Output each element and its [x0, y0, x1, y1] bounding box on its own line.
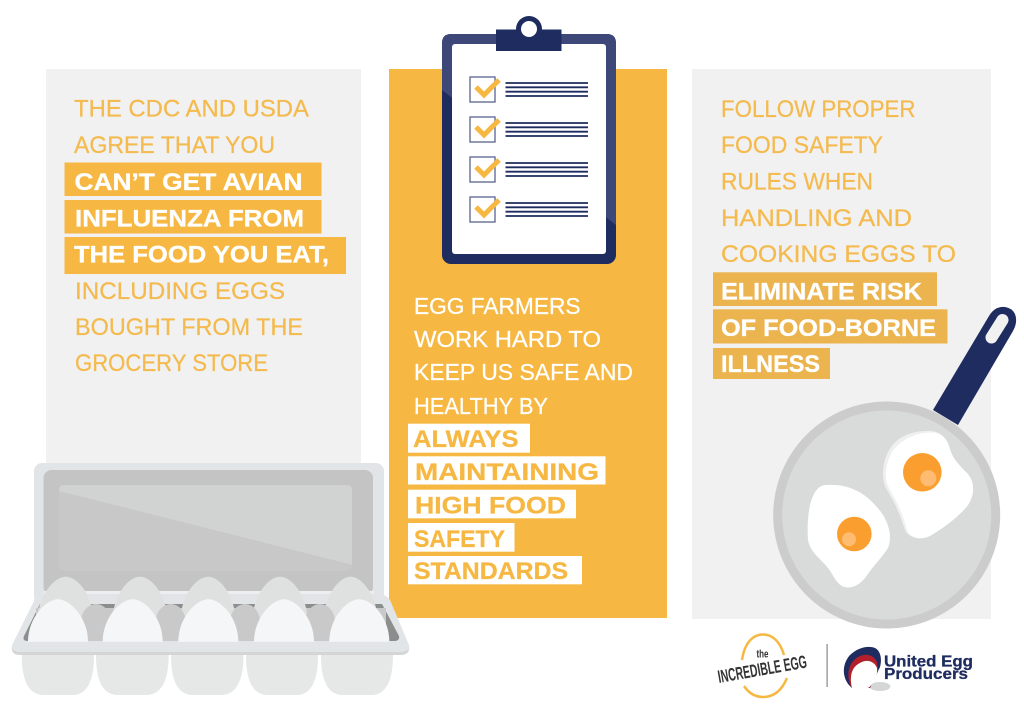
highlighted statement: cannot get avian influenza from food: CAN’T GET AVIAN — [74, 169, 302, 196]
highlighted statement: eliminate risk of food-borne illness — [713, 272, 948, 379]
logo: The Incredible Egg — [716, 634, 808, 697]
panel: egg farmers message — [389, 69, 667, 618]
highlighted statement: always maintaining high food safety standards: STANDARDS — [414, 558, 568, 585]
text block: follow proper food safety rules: FOOD SAFETY — [721, 132, 883, 159]
text block: CDC and USDA agree: AGREE THAT YOU — [74, 132, 275, 159]
panel: CDC and USDA message — [46, 69, 361, 469]
text block: follow proper food safety rules: FOLLOW PROPER — [721, 96, 916, 123]
text block: egg farmers work hard: EGG FARMERS — [414, 293, 580, 319]
text block: follow proper food safety rules: HANDLING AND — [721, 205, 912, 232]
icon: egg carton — [12, 463, 409, 695]
fried egg right — [883, 431, 973, 538]
highlighted statement: always maintaining high food safety standards: SAFETY — [414, 526, 505, 553]
highlighted statement: eliminate risk of food-borne illness: ELIMINATE RISK — [721, 278, 923, 305]
highlighted statement: always maintaining high food safety standards — [408, 424, 606, 585]
checklist row 1 — [470, 77, 588, 102]
logo: United Egg Producers: United Egg — [884, 654, 973, 671]
icon: frying pan with eggs — [773, 307, 1016, 628]
logo: United Egg Producers: Producers — [884, 666, 968, 683]
checklist row 2 — [470, 117, 588, 142]
text block: including eggs from grocery store: INCLUDING EGGS — [75, 278, 285, 305]
text block: follow proper food safety rules: COOKING EGGS TO — [721, 241, 956, 268]
egg cups — [22, 655, 393, 695]
pan body — [773, 402, 1000, 628]
text block: egg farmers work hard: HEALTHY BY — [414, 393, 548, 419]
text block: egg farmers work hard: KEEP US SAFE AND — [414, 359, 633, 385]
logo: The Incredible Egg: the — [756, 648, 768, 660]
highlighted statement: always maintaining high food safety standards: ALWAYS — [413, 426, 518, 453]
text block: CDC and USDA agree — [74, 96, 309, 159]
text block: including eggs from grocery store — [75, 278, 303, 377]
highlighted statement: eliminate risk of food-borne illness: ILLNESS — [721, 351, 820, 378]
checklist row 4 — [470, 197, 588, 222]
checklist row 3 — [470, 157, 588, 182]
front row of eggs — [28, 599, 389, 642]
pan handle — [933, 307, 1016, 425]
highlighted statement: always maintaining high food safety standards: MAINTAINING — [415, 459, 599, 486]
highlighted statement: cannot get avian influenza from food — [64, 162, 346, 274]
highlighted statement: cannot get avian influenza from food: THE FOOD YOU EAT, — [74, 242, 329, 269]
logo: The Incredible Egg: INCREDIBLE EGG — [716, 652, 808, 687]
highlighted statement: eliminate risk of food-borne illness: OF FOOD-BORNE — [721, 315, 936, 342]
text block: follow proper food safety rules: RULES WHEN — [721, 168, 873, 196]
text block: including eggs from grocery store: BOUGHT FROM THE — [75, 314, 303, 341]
text block: egg farmers work hard: WORK HARD TO — [414, 326, 601, 352]
carton lid — [34, 463, 384, 605]
tray interior — [24, 604, 399, 641]
highlighted statement: cannot get avian influenza from food: INFLUENZA FROM — [75, 206, 304, 233]
text block: CDC and USDA agree: THE CDC AND USDA — [74, 96, 309, 122]
clipboard clip — [496, 16, 562, 51]
highlighted statement: always maintaining high food safety standards: HIGH FOOD — [415, 492, 566, 520]
text block: follow proper food safety rules — [721, 96, 956, 268]
panel: food safety rules message — [692, 69, 991, 619]
icon: clipboard checklist — [442, 16, 616, 264]
text block: egg farmers work hard — [414, 293, 633, 419]
logo: United Egg Producers — [826, 644, 973, 691]
text block: including eggs from grocery store: GROCERY STORE — [75, 350, 268, 377]
tray rim — [12, 594, 409, 655]
fried egg left — [808, 485, 890, 588]
back row of eggs — [37, 577, 378, 625]
carton dividers — [81, 604, 335, 640]
